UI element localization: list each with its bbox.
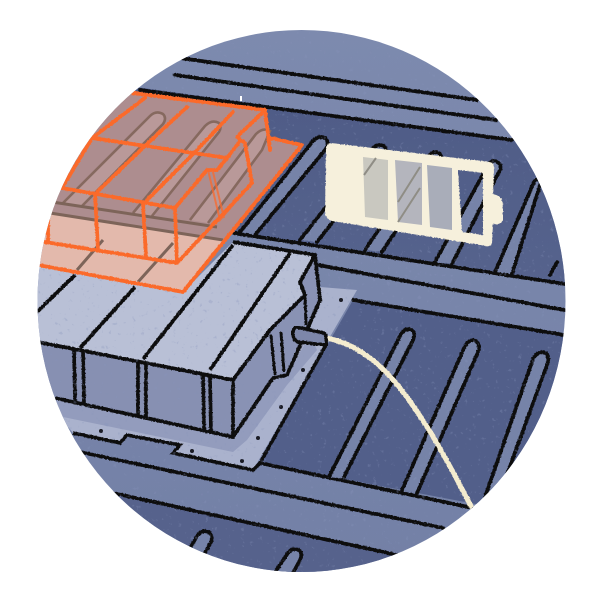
- mounting flange: [55, 287, 357, 470]
- plug connector: [293, 327, 326, 345]
- overlay base plate: [40, 94, 222, 290]
- box side face: [234, 262, 318, 430]
- battery cell 3: [427, 165, 452, 230]
- surface grain: [38, 58, 563, 572]
- box top face: [30, 242, 315, 380]
- battery box: [30, 242, 320, 437]
- flange plate: [55, 287, 357, 470]
- battery level icon: [325, 143, 503, 246]
- overlay dark upper area: [52, 94, 298, 240]
- flange rivets: [99, 298, 343, 463]
- bottom dark panel: [116, 494, 394, 572]
- upper slots: [240, 137, 557, 275]
- overlay orange wireframe: [38, 93, 302, 292]
- upper dark panel: [100, 82, 570, 285]
- box outlines: [37, 242, 320, 437]
- white tick: [240, 96, 242, 101]
- battery body: [325, 143, 503, 246]
- battery cell 2: [395, 160, 422, 225]
- flange edges: [73, 343, 327, 470]
- overlay ghost lines: [50, 202, 223, 282]
- flange shadow: [55, 335, 317, 452]
- floor lines and slots: [80, 58, 570, 575]
- battery cell 1: [363, 157, 388, 220]
- overlay inner thin lines: [208, 172, 246, 222]
- cable: [326, 338, 472, 508]
- orange outline overlay: [30, 93, 302, 292]
- box front face: [40, 343, 232, 434]
- overlay slots: [63, 112, 270, 223]
- lower dark panel: [263, 302, 564, 504]
- battery cell strokes: [364, 158, 420, 222]
- lower slots: [188, 329, 548, 575]
- upper rail lines: [80, 58, 570, 555]
- illustration: battery pack on a ribbed floor: [38, 30, 566, 572]
